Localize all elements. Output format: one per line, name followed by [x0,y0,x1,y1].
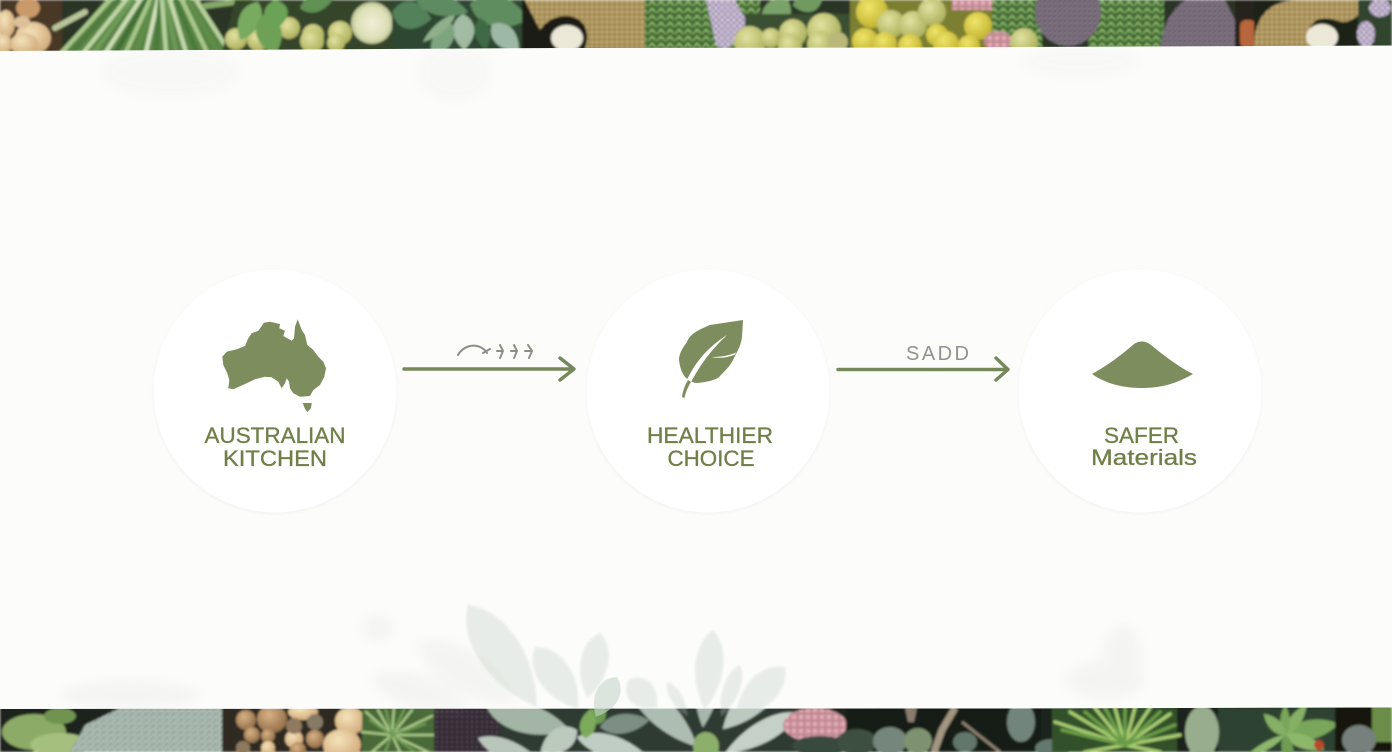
icon: leaf [679,320,743,398]
spiky purple thistle [1035,0,1101,46]
scribble mark [458,345,532,358]
step 1: Australian Kitchen [154,270,396,512]
bottom plant strip [0,629,1392,752]
dark background under succulents [500,708,800,752]
label: Healthier Choice [647,423,773,471]
ghost succulents fading into panel [60,593,1145,727]
arrow 2 with scribble [838,343,1008,380]
top plant strip [0,0,1392,61]
pale oval leaf [1185,706,1219,752]
circle 2 [586,270,830,512]
peach fruits [0,0,62,55]
step 3: Safer Materials [1018,270,1262,512]
label: Healthier Choice: HEALTHIER [647,423,773,448]
green pine tuft [362,708,436,752]
arrow shaft and head [838,358,1008,380]
small bright faded leaf [586,672,627,722]
arrow 1 with scribble [404,345,574,380]
tan pebbles [222,704,365,752]
ghost leaves top [100,42,1140,102]
fluffy seed ball [351,2,393,44]
fern and lilac [645,0,824,50]
label: Safer Materials: Materials [1091,445,1197,470]
nearer faded leaves [450,593,796,727]
pink flower cluster [783,708,847,742]
circle 3 [1018,270,1262,512]
bright green pine [1052,708,1180,752]
silver foliage [70,708,232,752]
label: Australian Kitchen [204,423,346,471]
label: Safer Materials: SAFER [1104,423,1179,448]
dark plants right edge [1314,706,1392,752]
star leaf plant [1218,701,1341,752]
green fern [1088,0,1164,50]
tan mound and cream tuft right [1254,0,1360,50]
pale succulents [474,629,802,752]
label: Australian Kitchen: AUSTRALIAN [204,423,346,448]
green grass fan [55,0,250,54]
grey-green leaves [390,0,532,61]
label: Safer Materials [1091,423,1197,470]
circle 1 [154,270,396,512]
green succulent left [2,708,90,752]
pink cluster and pale fruit [984,0,1042,56]
icon: map of Australia [222,319,326,412]
label: Healthier Choice: CHOICE [668,446,754,471]
pale and yellow fruits [734,0,1000,58]
leaves with pale fruits [222,0,395,58]
far faded leaves [60,614,1145,724]
purple spiky mound [1160,0,1246,50]
step 2: Healthier Choice [586,270,830,512]
orange seeds on dark [1235,0,1260,50]
icon: powder mound [1092,341,1193,388]
tan mound with cream tuft [522,0,647,51]
dark purple seed head [434,708,506,752]
label: Australian Kitchen: KITCHEN [223,446,327,471]
dark leaves and twigs [792,702,1071,752]
arrow shaft and head [404,358,574,380]
scribble text: SADD [906,343,969,365]
lilac sprigs right [1357,0,1392,50]
